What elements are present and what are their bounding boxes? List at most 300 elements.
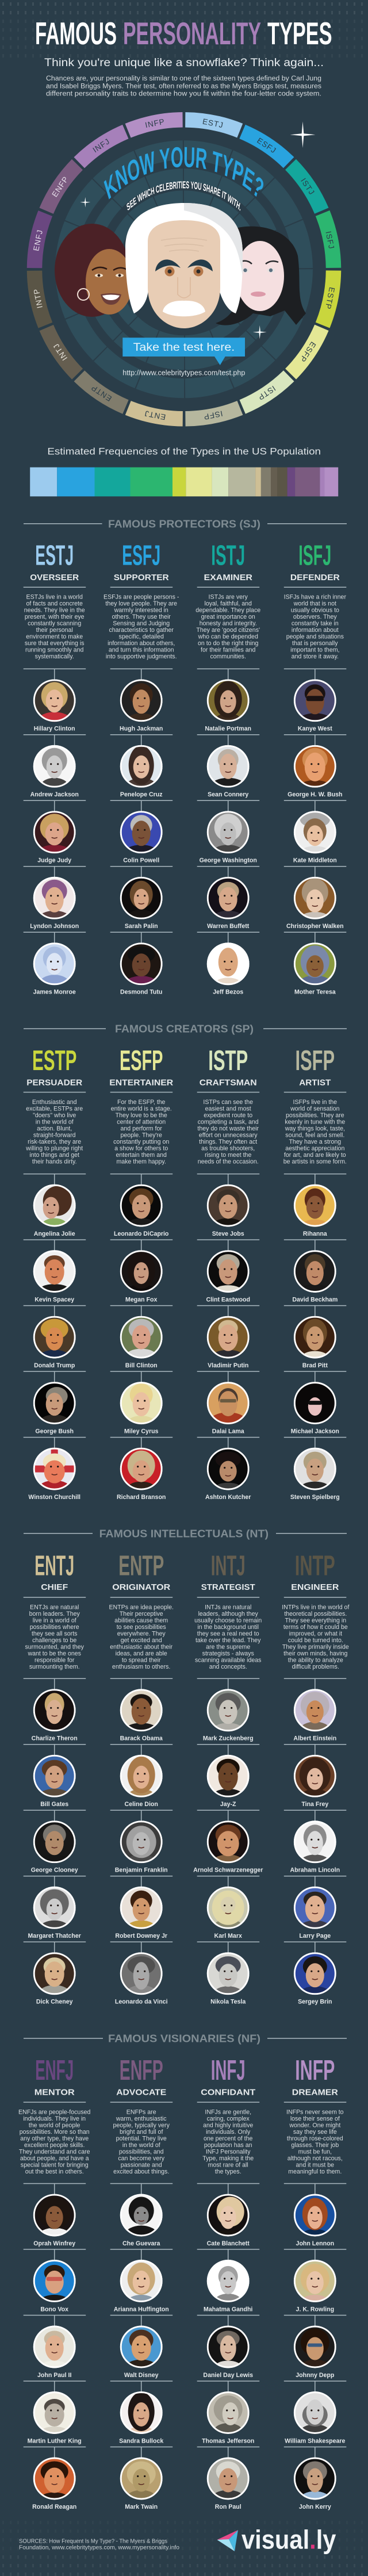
portrait: Rihanna (294, 1184, 336, 1231)
description: challenges to be (32, 1637, 76, 1644)
description: the ability to analyze (288, 1657, 343, 1663)
portrait: Hillary Clinton (33, 679, 76, 722)
portrait: Karl Marx (207, 1887, 250, 1935)
description: usually obvious to (291, 607, 339, 614)
name: Brad Pitt (302, 1362, 328, 1369)
name: Bill Clinton (125, 1362, 158, 1369)
description: most rare of all (208, 2161, 248, 2168)
description: for art, and are likely to (284, 1152, 346, 1159)
type code: ESFJ (122, 540, 160, 572)
column: ENFJ (18, 2055, 91, 2510)
portrait: J. K. Rowling (294, 2260, 336, 2309)
name: Vladimir Putin (208, 1362, 248, 1369)
column: ESTP (24, 1045, 86, 1501)
description: sure that everything is (25, 640, 85, 647)
description: great importance on (201, 614, 255, 620)
description: constantly scanning (28, 620, 81, 627)
description: individuals. They live in (23, 2115, 86, 2122)
description: enthusiasm to others. (112, 1663, 170, 1670)
type code: ENFJ (35, 2055, 74, 2086)
description: individuals. Only (206, 2129, 251, 2136)
description: INFPs never seem to (286, 2109, 344, 2115)
description: excited about things. (113, 2168, 169, 2175)
description: responsible for (34, 1657, 75, 1663)
portrait: Robert Downey Jr (120, 1887, 163, 1937)
description: through rose-colored (287, 2135, 343, 2142)
portrait: Oprah Winfrey (33, 2194, 76, 2244)
name: Kevin Spacey (34, 1296, 74, 1303)
portrait: John Kerry (294, 2458, 336, 2507)
description: leaders, although they (198, 1611, 259, 1617)
wordmark: visual.ly (241, 2525, 336, 2555)
description: honesty and integrity. (200, 620, 257, 627)
ring labels: ENFP (50, 175, 70, 198)
ring labels: ESFP (298, 340, 317, 364)
ring labels: ISTP (256, 384, 277, 402)
description: INFJ Personality (206, 2148, 251, 2155)
description: surmounted, and they (25, 1643, 85, 1650)
ring labels: ESFJ (255, 136, 278, 155)
portrait: Mark Twain (120, 2458, 163, 2506)
portrait: Dalai Lama (207, 1382, 250, 1431)
name: John Paul II (37, 2372, 71, 2379)
column: ENTJ (24, 1550, 86, 2006)
description: Type, making it the (202, 2155, 254, 2162)
description: "doers" who live (33, 1112, 76, 1119)
portrait: Michael Jackson (294, 1382, 336, 1424)
name: George H. W. Bush (288, 791, 342, 798)
portrait: Desmond Tutu (120, 942, 163, 986)
name: Kate Middleton (293, 857, 337, 864)
description: as trouble shooters, (201, 1145, 255, 1152)
description: meaningful to them. (288, 2168, 342, 2175)
portrait: Sean Connery (207, 745, 250, 788)
description: ISFJs have a rich inner (284, 594, 346, 601)
description: communities. (210, 653, 246, 660)
section heading: FAMOUS PROTECTORS (SJ) (108, 518, 260, 530)
personality wheel (26, 112, 342, 427)
role: EXAMINER (204, 573, 252, 582)
portrait: Bono Vox (33, 2260, 76, 2309)
description: into supportive judgments. (106, 653, 177, 660)
portrait: Barack Obama (120, 1689, 163, 1739)
name: Oprah Winfrey (33, 2240, 75, 2247)
description: present, with their eye (25, 614, 85, 620)
description: easiest and most (205, 1105, 251, 1112)
description: ESFJs are people persons - (103, 594, 179, 601)
description: they see all sorts (32, 1630, 77, 1637)
role: DREAMER (292, 2087, 338, 2097)
name: Sandra Bullock (119, 2437, 163, 2444)
description: the types. (215, 2168, 241, 2175)
description: potential. They live (116, 2135, 167, 2142)
portrait: Che Guevara (120, 2194, 163, 2244)
description: constantly putting on (113, 1138, 169, 1145)
portrait: James Monroe (33, 942, 76, 986)
description: environment to make (26, 634, 83, 641)
description: rising to meet the (205, 1152, 251, 1159)
heading: frequencies: Estimated Frequencies of the Types in the US Population (47, 446, 321, 457)
portrait: Steve Jobs (207, 1184, 250, 1235)
star (253, 325, 267, 339)
type code: ESFP (120, 1045, 163, 1076)
description: difficult problems. (292, 1663, 339, 1670)
description: improved, or what it (289, 1630, 342, 1637)
name: Desmond Tutu (120, 989, 162, 996)
description: passionate and (121, 2161, 162, 2168)
name: Arnold Schwarzenegger (193, 1867, 263, 1874)
name: Ron Paul (215, 2504, 241, 2510)
description: center of attention (117, 1119, 166, 1126)
section heading: FAMOUS VISIONARIES (NF) (108, 2033, 260, 2045)
intro text: different personality traits to determine how you fit within the four-letter code system. (46, 91, 321, 98)
description: sound, feel and smell. (285, 1132, 344, 1138)
sources (19, 2538, 179, 2551)
name: Christopher Walken (286, 923, 344, 930)
ring labels: INFP (144, 117, 166, 129)
role: PERSUADER (26, 1078, 82, 1087)
description: any other type, they have (20, 2135, 89, 2142)
name: Ashton Kutcher (205, 1494, 251, 1501)
name: Celine Dion (125, 1801, 158, 1808)
portrait: Benjamin Franklin (120, 1820, 163, 1870)
name: Barack Obama (120, 1735, 163, 1742)
type code: INFJ (211, 2055, 246, 2086)
name: Sergey Brin (298, 1999, 332, 2006)
name: Benjamin Franklin (115, 1867, 168, 1874)
outer ring segments (0, 58, 368, 481)
description: strategists - always (202, 1650, 254, 1657)
name: Winston Churchill (28, 1494, 80, 1501)
description: who can be depended (198, 634, 258, 641)
portrait: George Clooney (33, 1820, 76, 1870)
portrait: Bill Clinton (120, 1316, 163, 1365)
portrait: John Lennon (294, 2194, 336, 2242)
description: effort on unnecessary (199, 1132, 258, 1138)
ring labels: ENTJ (144, 409, 166, 421)
description: running smoothly and (25, 647, 83, 654)
role: SUPPORTER (114, 573, 169, 582)
role: ENGINEER (291, 1582, 339, 1592)
description: born leaders. They (29, 1611, 80, 1617)
description: ENFPs are (126, 2109, 156, 2115)
description: ENTJs are natural (30, 1604, 79, 1611)
portrait: Miley Cyrus (120, 1382, 163, 1429)
ring labels: ENTP (89, 383, 113, 403)
portrait: Christopher Walken (293, 876, 336, 919)
name: Andrew Jackson (30, 791, 79, 798)
name: Dick Cheney (36, 1999, 73, 2006)
name: Leonardo DiCaprio (114, 1230, 169, 1237)
description: about people, and have a (20, 2155, 89, 2162)
description: usually choose to remain (194, 1617, 262, 1624)
portrait: Leonardo DiCaprio (120, 1184, 163, 1235)
portrait: Mark Zuckerberg (207, 1689, 250, 1739)
type code: ESTJ (35, 540, 74, 572)
portrait: Bill Gates (33, 1755, 76, 1805)
title: TYPES (267, 16, 332, 51)
portrait: Larry Page (294, 1887, 336, 1937)
name: Megan Fox (125, 1296, 157, 1303)
description: on to do the right thing (198, 640, 259, 647)
description: people and situations (286, 634, 344, 641)
portrait: Clint Eastwood (207, 1250, 250, 1299)
intro text: and Isabel Briggs Myers. Their test, often referred to as the Myers Briggs test, measures (46, 83, 321, 90)
name: Donald Trump (34, 1362, 75, 1369)
title (35, 16, 332, 51)
description: excitable, ESTPs are (26, 1105, 83, 1112)
description: possibilities. More so than (20, 2129, 90, 2136)
type code: INTJ (211, 1550, 246, 1581)
description: out the best in others. (25, 2168, 84, 2175)
description: others. They use their (112, 614, 171, 620)
description: for their families and (201, 647, 255, 654)
name: Steve Jobs (212, 1230, 244, 1237)
name: Nikola Tesla (210, 1999, 246, 2006)
description: caring, complex (207, 2115, 250, 2122)
name: Richard Branson (117, 1494, 166, 1501)
role: ENTERTAINER (109, 1078, 173, 1087)
portrait: Charlize Theron (33, 1689, 76, 1738)
ring labels: ENFJ (32, 229, 44, 252)
ring labels: ISFP (202, 409, 224, 421)
role: MENTOR (34, 2087, 75, 2097)
name: Judge Judy (37, 857, 71, 864)
role: CRAFTSMAN (200, 1078, 257, 1087)
description: special talent for bringing (21, 2161, 89, 2168)
type code: ENTP (118, 1550, 164, 1581)
role: STRATEGIST (201, 1582, 255, 1592)
description: observers. They (293, 614, 337, 620)
portrait: Cate Blanchett (207, 2194, 250, 2241)
type code: ISFJ (298, 540, 331, 572)
portrait: Margaret Thatcher (33, 1887, 76, 1937)
subtitle: Think you're unique like a snowflake? Think again... (44, 57, 324, 69)
name: Che Guevara (122, 2240, 160, 2247)
description: expedient route to (204, 1112, 252, 1119)
description: characteristics to gather (109, 627, 174, 634)
name: Clint Eastwood (206, 1296, 250, 1303)
name: J. K. Rowling (296, 2306, 334, 2313)
name: Rihanna (303, 1230, 327, 1237)
description: can become very (118, 2155, 165, 2162)
name: Michael Jackson (291, 1428, 339, 1435)
star (80, 197, 90, 208)
description: that is personally (292, 640, 338, 647)
type code: ESTP (32, 1045, 76, 1076)
description: warmly interested in (114, 607, 168, 614)
description: entire world is a stage. (111, 1105, 172, 1112)
column: INFJ (197, 2055, 259, 2510)
name: Robert Downey Jr (115, 1933, 167, 1939)
name: Abraham Lincoln (290, 1867, 340, 1874)
description: they see a real need to (197, 1630, 259, 1637)
type code: ENTJ (34, 1550, 74, 1581)
name: Bill Gates (40, 1801, 68, 1808)
name: Martin Luther King (28, 2437, 82, 2444)
description: into things and get (29, 1152, 79, 1159)
name: Charlize Theron (32, 1735, 78, 1742)
name: Leonardo da Vinci (115, 1999, 168, 2006)
description: INTJs are natural (205, 1604, 251, 1611)
description: their personal (36, 627, 73, 634)
name: William Shakespeare (285, 2437, 346, 2444)
description: loyal, faithful, and (204, 600, 252, 607)
type code: INFP (295, 2055, 335, 2086)
type code: ENFP (120, 2055, 163, 2086)
description: constantly take in (292, 620, 339, 627)
name: Thomas Jefferson (202, 2437, 254, 2444)
section heading: FAMOUS CREATORS (SP) (115, 1023, 254, 1035)
description: possibilities. They are (286, 1112, 344, 1119)
name: Mark Zuckenberg (203, 1735, 254, 1742)
name: Larry Page (299, 1933, 331, 1939)
name: Mahatma Gandhi (204, 2306, 252, 2313)
description: things. They often act (199, 1138, 257, 1145)
portrait: Thomas Jefferson (207, 2391, 250, 2441)
description: needs of the occasion. (198, 1158, 259, 1165)
column: ESFP (109, 1045, 173, 1501)
name: Margaret Thatcher (28, 1933, 81, 1939)
logo: visually (217, 2525, 336, 2555)
role: DEFENDER (290, 573, 340, 582)
callout: take the test (122, 338, 245, 365)
subheading: see which celebrities: SEE WHICH CELEBRITIES YOU SHARE IT WITH. (126, 181, 240, 211)
description: specific, detailed (119, 634, 164, 641)
description: ISTJs are very (209, 594, 248, 601)
column: INFP (284, 2055, 346, 2510)
description: needs. They live in the (24, 607, 85, 614)
portrait: Natalie Portman (207, 679, 250, 722)
description: and turn this information (109, 647, 174, 654)
name: Hillary Clinton (34, 726, 75, 733)
portrait: George H. W. Bush (293, 745, 336, 788)
heading: know your type: KNOW YOUR TYPE? (103, 147, 263, 199)
icon: gem (217, 2530, 238, 2551)
name: John Lennon (296, 2240, 334, 2247)
description: of facts and concrete (26, 600, 83, 607)
name: Ronald Reagan (32, 2504, 76, 2510)
portrait: Steven Spielberg (294, 1448, 336, 1498)
description: ideas, and are able (116, 1650, 167, 1657)
description: surmounting them. (29, 1663, 80, 1670)
name: Hugh Jackman (120, 726, 163, 733)
portrait: Arnold Schwarzenegger (207, 1820, 250, 1870)
description: INFJs are gentle, (205, 2109, 251, 2115)
ring labels: INTP (32, 288, 44, 309)
description: and it must be (296, 2161, 334, 2168)
description: population has an (204, 2142, 252, 2149)
portrait: Arianna Huffington (120, 2260, 163, 2309)
column: ENFP (110, 2055, 172, 2510)
description: scanning available ideas (195, 1657, 261, 1663)
type code: ISTJ (211, 540, 245, 572)
name: George Washington (200, 857, 257, 864)
portrait: Martin Luther King (33, 2391, 76, 2440)
column: ISFP (283, 1045, 347, 1501)
description: excellent people skills. (24, 2142, 85, 2149)
description: Sensing and Judging (113, 620, 170, 627)
portrait: Dick Cheney (33, 1952, 76, 2003)
description: in the world of (36, 1119, 74, 1126)
name: Sean Connery (208, 791, 248, 798)
portrait: Johnny Depp (294, 2325, 336, 2376)
description: people. They're (120, 1132, 162, 1138)
portrait: Ronald Reagan (33, 2458, 76, 2506)
chart: frequency bar (30, 467, 338, 496)
description: action. Blunt, (37, 1125, 72, 1132)
title: FAMOUS (35, 16, 117, 51)
portrait: Kevin Spacey (33, 1250, 76, 1300)
name: Steven Spielberg (290, 1494, 340, 1501)
name: Warren Buffett (207, 923, 250, 930)
description: systematically. (35, 653, 74, 660)
type code: ISTP (208, 1045, 248, 1076)
description: and store it away. (292, 653, 339, 660)
column: ISFJ (284, 540, 346, 996)
description: They have a strong (289, 1138, 341, 1145)
portrait: Sarah Palin (120, 876, 163, 919)
description: world that is not (293, 600, 336, 607)
description: INTPs live in the world of (282, 1604, 349, 1611)
portrait: David Beckham (294, 1250, 336, 1300)
description: ISFPs live in the (293, 1099, 337, 1106)
description: theoretical possibilities. (284, 1611, 347, 1617)
description: possibilities where (30, 1624, 79, 1631)
description: straight-forward (33, 1132, 76, 1138)
description: Enthusiastic and (32, 1099, 77, 1106)
name: Mother Teresa (294, 989, 336, 996)
description: information about others, (108, 640, 175, 647)
description: They are 'good citizens' (196, 627, 260, 634)
name: Sarah Palin (125, 923, 158, 930)
role: ARTIST (299, 1078, 331, 1087)
intro text (46, 75, 321, 98)
portrait: Hugh Jackman (120, 679, 163, 722)
description: their hands dirty. (32, 1158, 76, 1165)
panel: famous protectors (24, 518, 347, 996)
description: enthusiastic about their (110, 1643, 173, 1650)
portrait: Mother Teresa (293, 942, 336, 986)
name: Jeff Bezos (213, 989, 243, 996)
portrait: John Paul II (33, 2325, 76, 2375)
title: PERSONALITY (123, 16, 261, 51)
name: George Clooney (31, 1867, 78, 1874)
portrait: Lyndon Johnson (33, 876, 76, 919)
name: Tina Frey (301, 1801, 328, 1808)
portrait: George Washington (207, 811, 250, 853)
portrait: Judge Judy (33, 811, 76, 853)
description: keenly in tune with the (285, 1119, 345, 1126)
name: Angelina Jolie (34, 1230, 75, 1237)
description: terms of how it could be (283, 1624, 348, 1631)
ring labels: ISTJ (299, 177, 316, 197)
description: ESTJs live in a world (26, 594, 83, 601)
role: CONFIDANT (201, 2087, 255, 2097)
description: one percent of the (204, 2135, 253, 2142)
description: They live primarily inside (282, 1643, 349, 1650)
description: they do not waste their (197, 1125, 259, 1132)
description: lose their sense of (290, 2115, 340, 2122)
name: Natalie Portman (205, 726, 251, 733)
portrait: Megan Fox (120, 1250, 163, 1300)
name: Colin Powell (123, 857, 159, 864)
description: world of sensation (290, 1105, 340, 1112)
ring labels: ESTJ (202, 117, 224, 129)
portrait: Jeff Bezos (207, 942, 250, 986)
description: a show for others to (114, 1145, 168, 1152)
name: Walt Disney (124, 2372, 159, 2379)
